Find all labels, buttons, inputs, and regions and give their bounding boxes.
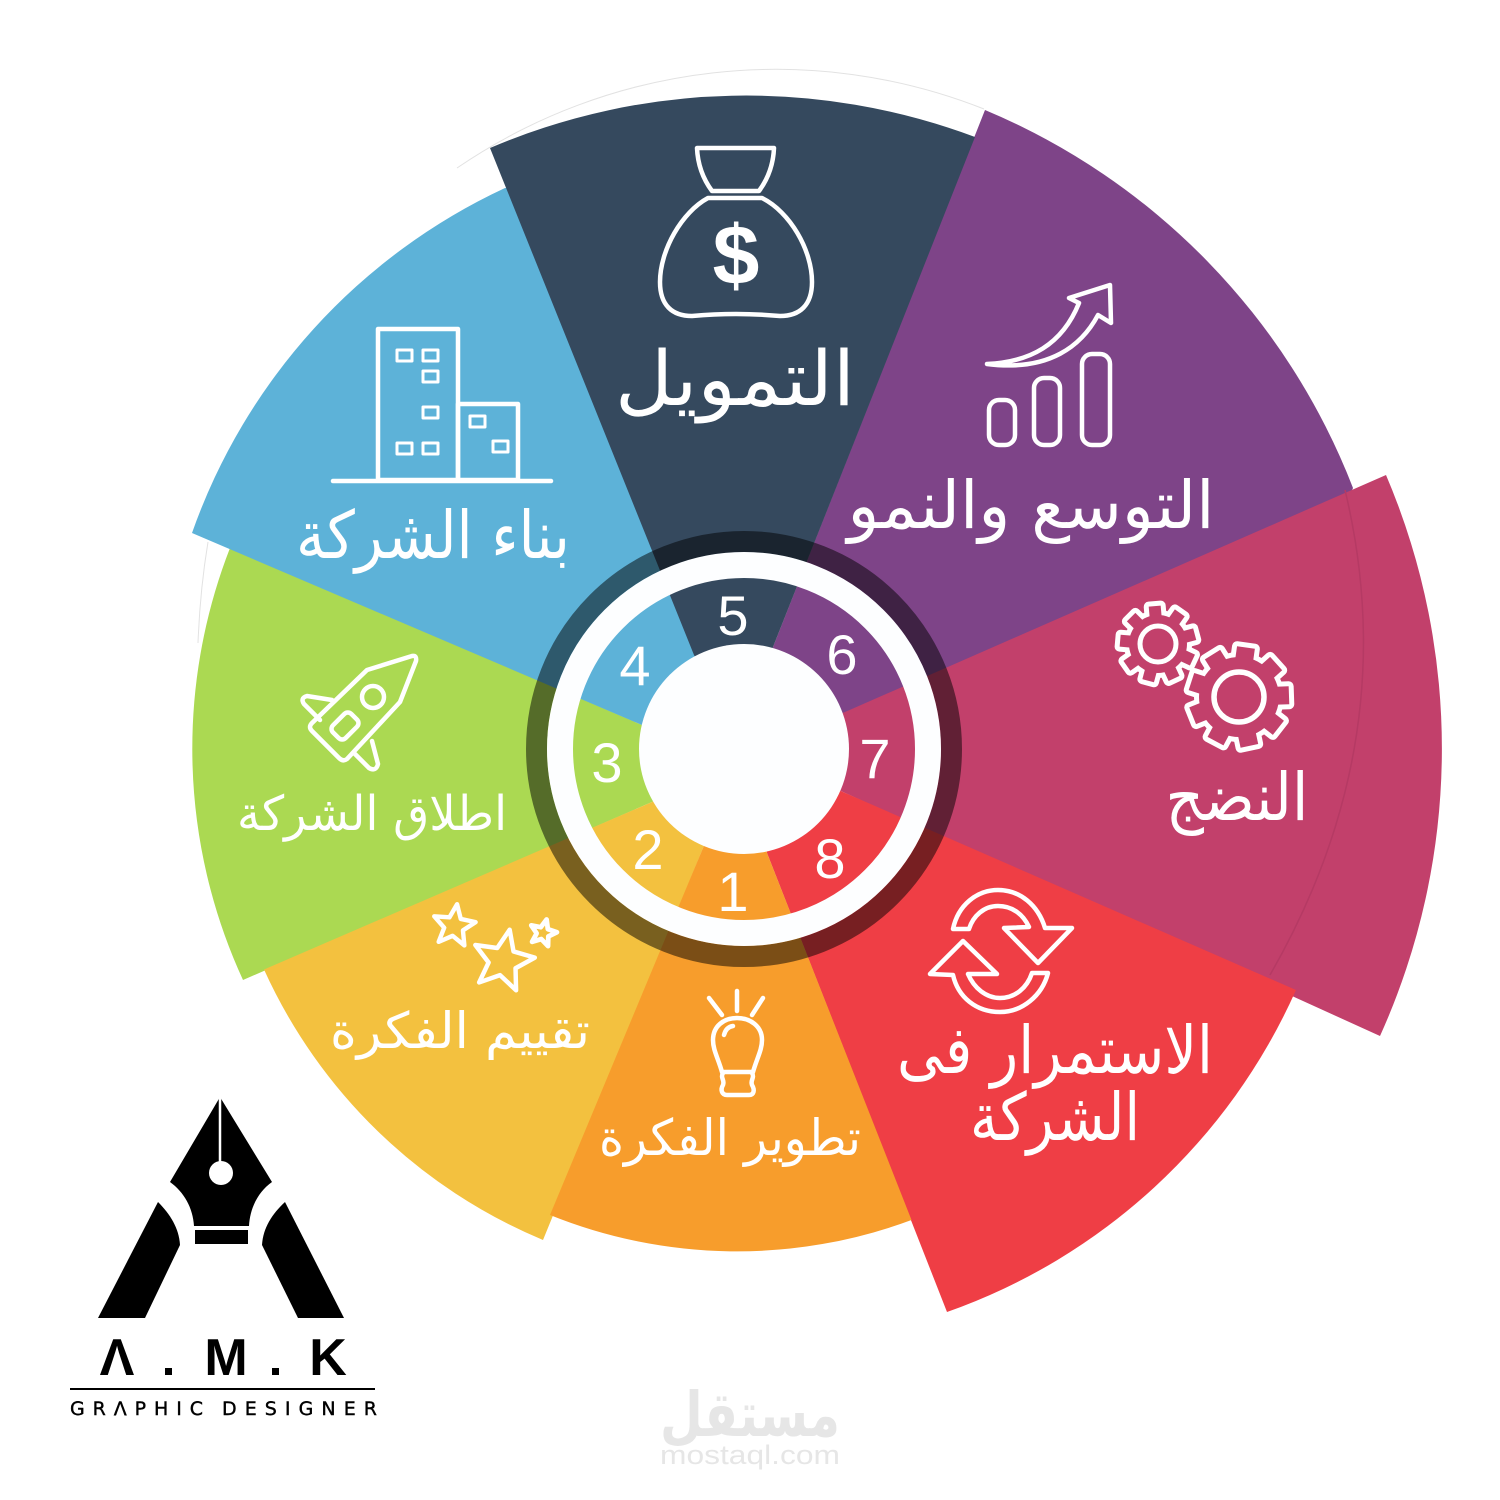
wedge: orange, idea development [550,749,912,1251]
wedge: purple, expansion and growth [744,110,1353,749]
heading: expansion and growth: التوسع والنمو [844,467,1214,544]
icon: stars [431,901,559,993]
wedge: yellow, idea evaluation [264,749,744,1240]
logo: A.M.K graphic designer: GRΛPHIC [70,1398,203,1420]
step numbers: 7 [859,727,891,790]
logo pen nib [170,1097,272,1226]
logo: A.M.K graphic designer [70,1095,377,1420]
logo: A.M.K graphic designer: DESIGNER [222,1398,377,1420]
heading: continuing in the company: الاستمرار فى [897,1012,1213,1089]
step numbers: 6 [826,623,858,686]
heading: evaluating the idea: تقييم الفكرة [330,1002,590,1060]
icon: rocket [303,656,416,769]
icon: refresh arrows [930,890,1072,1012]
heading: funding: التمويل [615,334,855,424]
logo: A.M.K graphic designer: Λ [100,1329,135,1387]
wedge: crimson, maturity [744,475,1442,1036]
step numbers: 3 [591,731,623,794]
heading: developing the idea: تطوير الفكرة [599,1109,861,1167]
heading: continuing in the company: الشركة [970,1079,1140,1156]
logo: A.M.K graphic designer: M [204,1329,248,1387]
icon: money bag [660,148,812,316]
step numbers: 4 [619,634,651,697]
step numbers: 1 [717,860,749,923]
step numbers: 8 [814,827,846,890]
watermark: mostaql [660,1378,840,1470]
icon: light bulb [709,991,763,1095]
logo: A.M.K graphic designer: K [309,1329,347,1387]
icon: money bag: $ [713,208,759,302]
icon: growth chart with arrow [987,285,1111,445]
icon: gears [1120,606,1289,748]
heading: building the company: بناء الشركة [296,497,570,574]
center dial rings [536,542,952,956]
wedge: red, continuity [744,749,1296,1312]
wedge: navy, funding [490,96,975,749]
icon: buildings [333,329,551,481]
wedge: green, launch [192,548,744,980]
step numbers: 2 [632,818,664,881]
step numbers [591,584,891,923]
heading: continuing in the company [897,1012,1213,1156]
watermark: mostaql: mostaql.com [660,1440,840,1470]
heading: maturity: النضج [1166,759,1308,836]
step numbers: 5 [717,584,749,647]
wedge: blue, building the company [192,188,744,749]
heading: launching the company: اطلاق الشركة [237,786,507,842]
watermark: mostaql: مستقل [660,1378,840,1451]
